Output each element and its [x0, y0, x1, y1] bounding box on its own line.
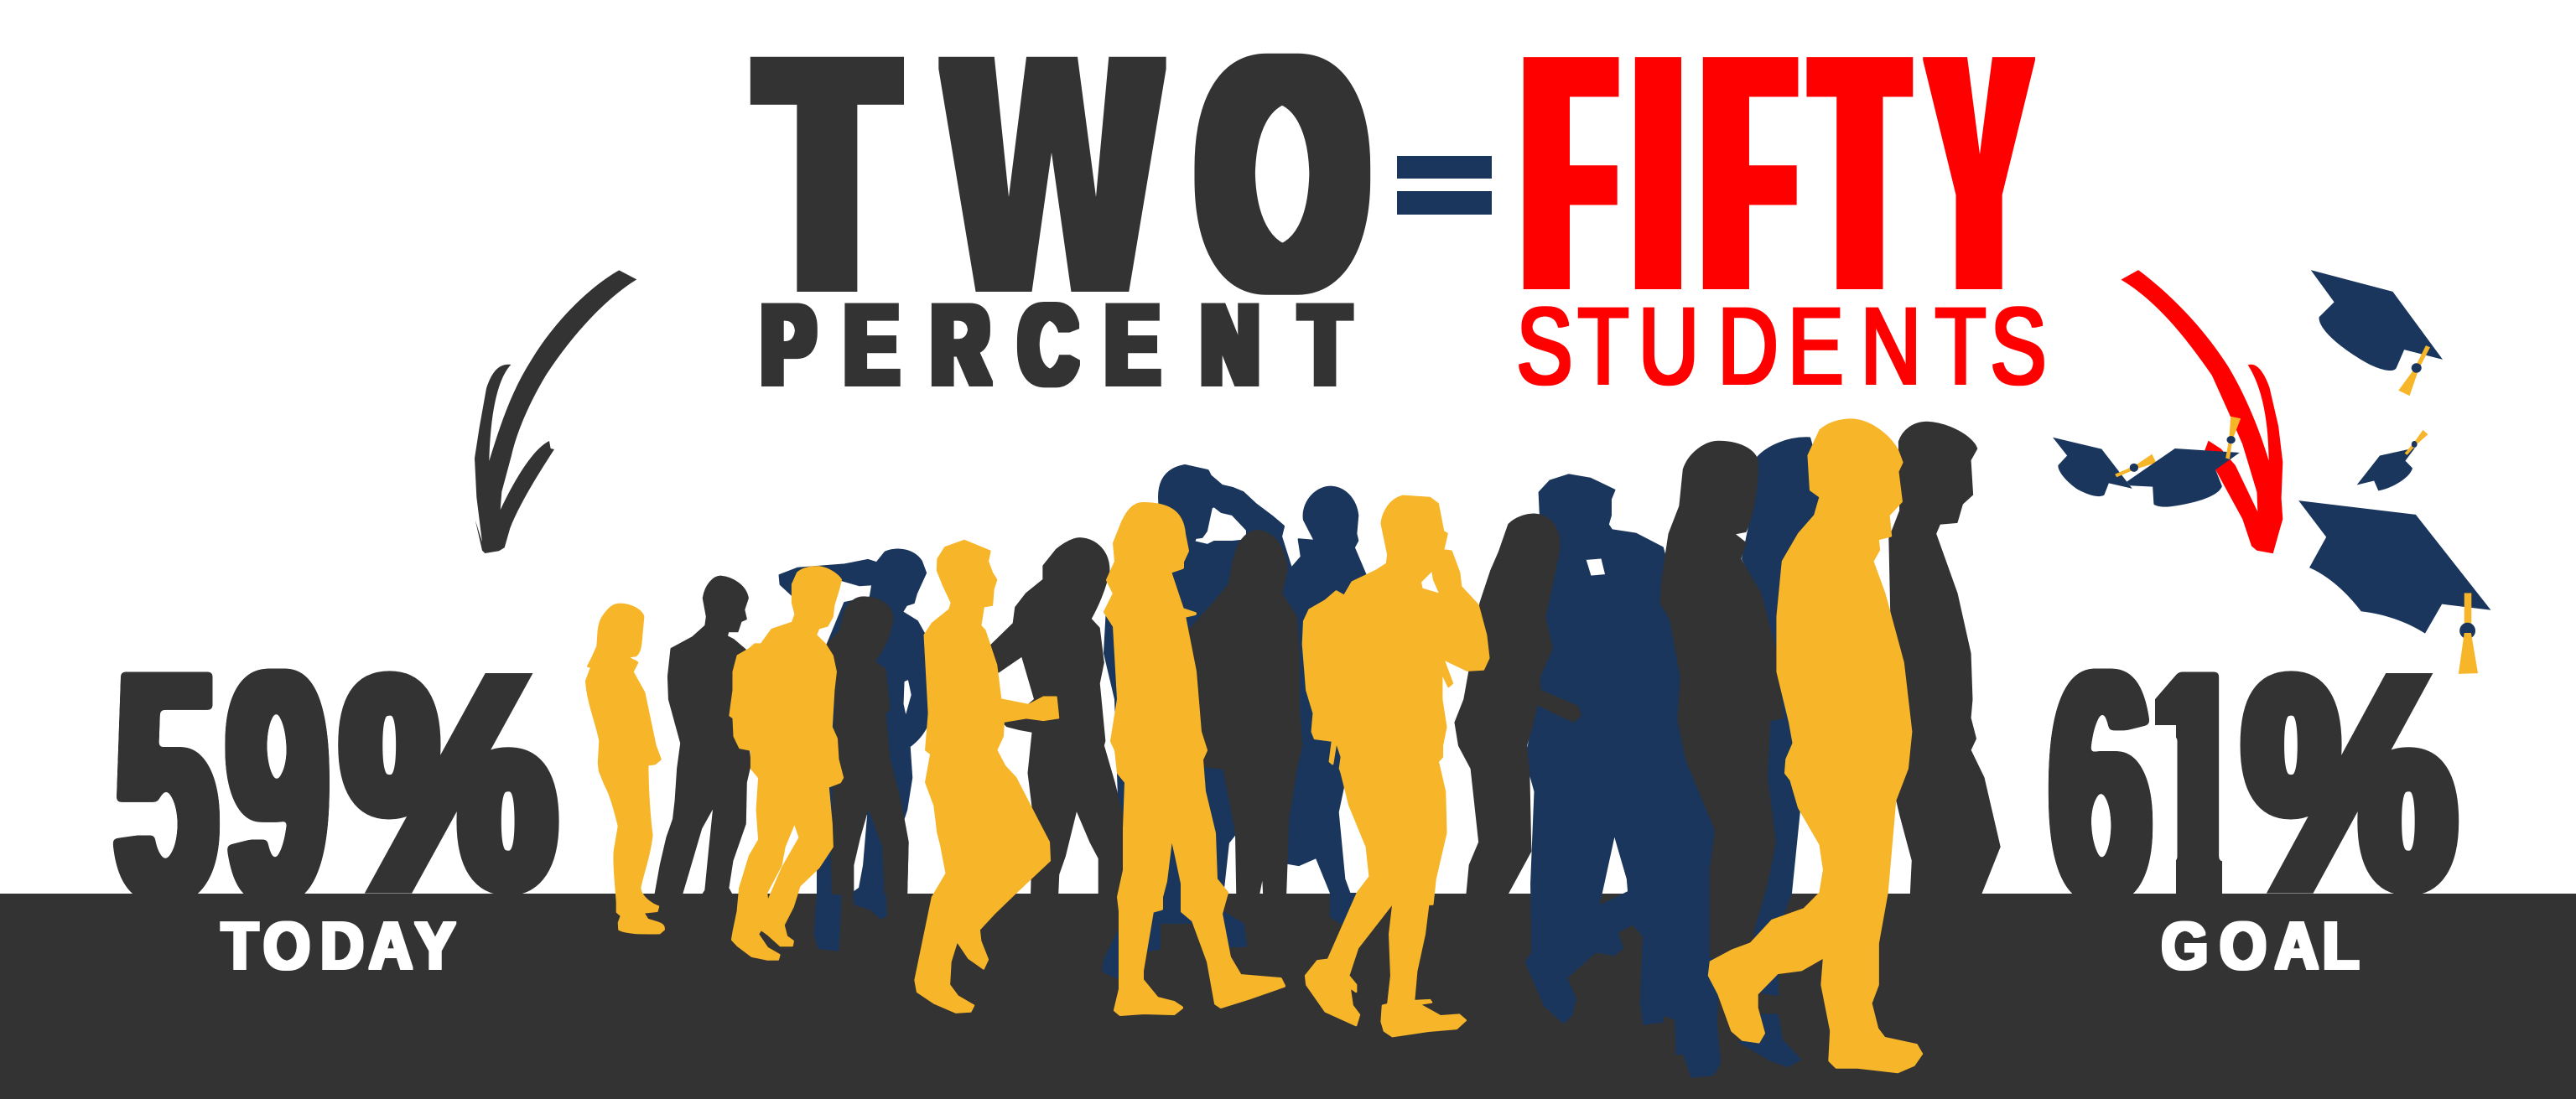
- dark student: woman behind big man: [1661, 442, 1783, 957]
- percent sign: %: [2244, 622, 2455, 943]
- dark student: man, far right: [1890, 422, 1999, 894]
- yellow student: big walking man: [1709, 420, 1922, 1072]
- label: TODAY: TODAY: [221, 909, 455, 983]
- percent sign: %: [342, 622, 556, 943]
- label: GOAL: GOAL: [2162, 909, 2359, 983]
- dark student: woman, center: [1184, 531, 1301, 894]
- navy student: woman behind backpack boy: [1283, 487, 1366, 925]
- yellow student: boy with backpack, hand to mouth: [1303, 496, 1488, 1036]
- digit 6: 6: [2050, 605, 2151, 967]
- navy student: tall figure behind center: [1104, 466, 1296, 978]
- navy student: behind big walking man: [1740, 438, 1831, 1066]
- arrow: dark hand-drawn arrow pointing down: [475, 270, 636, 553]
- yellow student: boy with backpack: [730, 567, 843, 960]
- dark student: man, far left: [656, 577, 750, 894]
- navy student: man with spiky hair: [1526, 474, 1720, 1077]
- equals sign: [1397, 156, 1492, 215]
- yellow student: girl, far left: [586, 604, 664, 933]
- yellow student: tall girl with long hair: [1105, 504, 1284, 1014]
- dark student: woman behind backpack boy: [828, 597, 908, 894]
- arrow: red hand-drawn arrow pointing down: [2121, 270, 2283, 553]
- word: TWO: TWO: [763, 0, 1364, 355]
- graduation cap: left: [2053, 438, 2156, 496]
- graduation cap: small right: [2357, 430, 2428, 490]
- stat: 61 percent goal: [2050, 605, 2455, 967]
- silhouette crowd of students: [586, 420, 1999, 1077]
- digit 1: 1: [2143, 605, 2244, 967]
- title: two percent equals fifty students: [761, 0, 2046, 408]
- dark student: woman with long hair, center left: [990, 538, 1127, 894]
- dark student: woman with long hair, center right: [1456, 515, 1581, 894]
- word: STUDENTS: STUDENTS: [1517, 285, 2046, 407]
- stat: 59 percent today: [116, 605, 556, 967]
- word: PERCENT: PERCENT: [761, 281, 1349, 408]
- yellow student: boy with raised fist: [915, 541, 1058, 1013]
- graduation cap: top right: [2311, 270, 2443, 396]
- graduation cap: center: [2127, 417, 2241, 507]
- navy student: arm raised behind head: [780, 550, 930, 951]
- dark ground band: [0, 894, 2576, 1099]
- graduation cap: large bottom right: [2298, 500, 2490, 674]
- flying graduation caps: [2053, 270, 2490, 674]
- number 59: 59: [116, 605, 328, 967]
